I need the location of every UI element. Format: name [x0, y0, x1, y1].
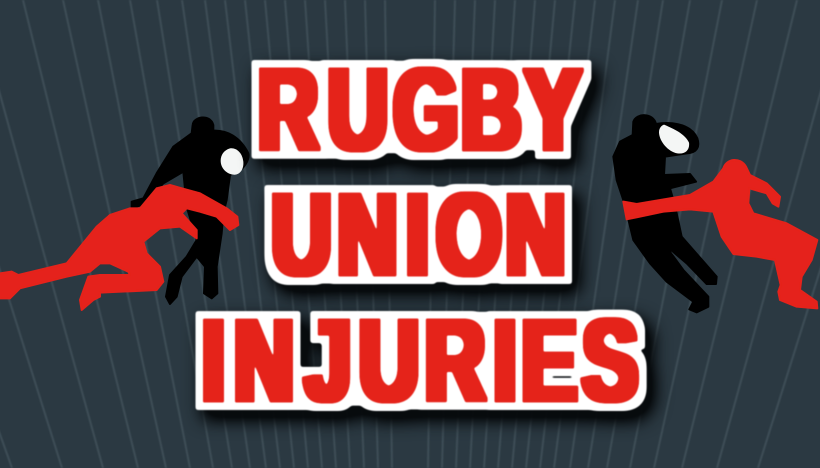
title line: UNION: UNION: [271, 171, 566, 300]
player: black ball carrier: [132, 117, 249, 304]
player: black ball carrier: [613, 115, 717, 312]
icon: rugby ball: [659, 125, 689, 154]
title line: INJURIES: INJURIES: [202, 297, 638, 426]
player: red tackler: [623, 160, 817, 308]
player: red tackler: [0, 185, 238, 310]
title: [202, 46, 638, 426]
title line: RUGBY: RUGBY: [258, 46, 581, 175]
illustration: left players tackle: [0, 117, 249, 310]
illustration: right players tackle: [613, 115, 817, 312]
icon: rugby ball: [221, 148, 243, 175]
